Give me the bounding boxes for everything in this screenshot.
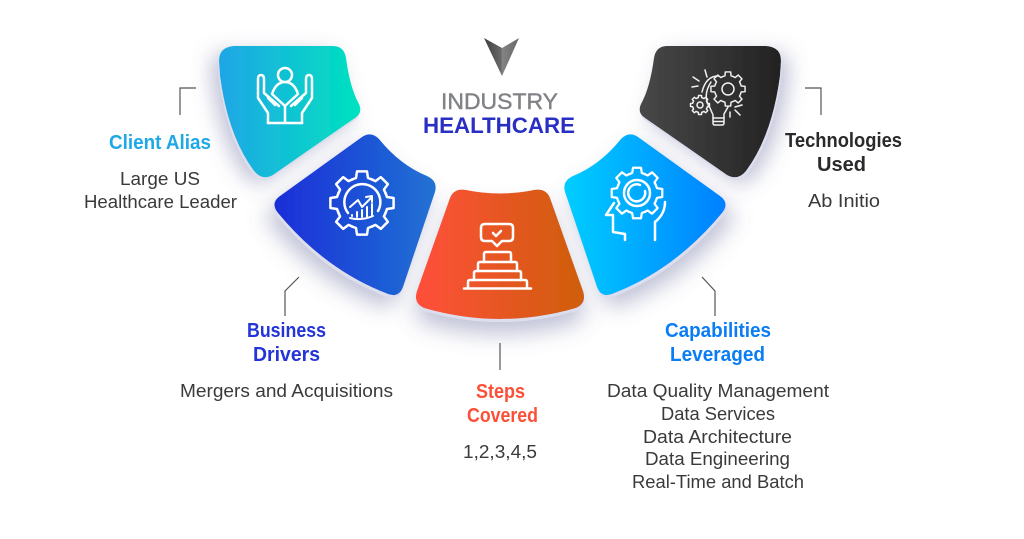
title: HEALTHCARE (423, 113, 575, 138)
text block: client alias: Large US (120, 169, 200, 189)
text block: client alias (84, 132, 237, 212)
text block: steps covered (463, 381, 538, 462)
panel: technologies used (640, 46, 781, 177)
text block: capabilities leveraged: Data Architecture (643, 427, 792, 447)
panel: steps covered (416, 190, 584, 319)
text block: business drivers (180, 320, 393, 401)
logo (484, 38, 519, 76)
text block: business drivers: Drivers (253, 344, 320, 366)
panel: business drivers (274, 134, 436, 295)
text block: technologies used: Ab Initio (808, 191, 880, 211)
leader line: steps covered (499, 343, 501, 370)
text block: steps covered: Steps (476, 381, 525, 403)
text block: capabilities leveraged: Real-Time and Batch (632, 472, 804, 492)
text block: capabilities leveraged (607, 320, 829, 492)
leader line: capabilities leveraged (702, 277, 715, 316)
leader line: business drivers (285, 277, 299, 316)
text block: technologies used: Technologies (785, 130, 902, 152)
text block: business drivers: Business (247, 320, 326, 342)
icon: hands holding person (258, 68, 312, 123)
text block: technologies used (785, 130, 902, 211)
text block: capabilities leveraged: Capabilities (665, 320, 771, 342)
text block: technologies used: Used (817, 154, 866, 176)
icon: light bulb with gears (691, 70, 745, 125)
leader line: technologies used (805, 88, 821, 115)
title: INDUSTRY (441, 89, 558, 114)
icon: head with gear (606, 168, 665, 240)
text block: steps covered: Covered (467, 405, 538, 427)
title (423, 89, 575, 138)
icon: stairs with check speech bubble (464, 224, 531, 288)
text block: client alias: Client Alias (109, 132, 211, 154)
text block: client alias: Healthcare Leader (84, 192, 237, 212)
text block: capabilities leveraged: Data Quality Management (607, 381, 829, 401)
leader line: client alias (180, 88, 196, 115)
text block: business drivers: Mergers and Acquisitions (180, 381, 393, 401)
text block: steps covered: 1,2,3,4,5 (463, 442, 537, 462)
text block: capabilities leveraged: Leveraged (670, 344, 765, 366)
text block: capabilities leveraged: Data Engineering (645, 449, 790, 469)
icon: gear with growth chart (330, 171, 394, 235)
panel: capabilities leveraged (564, 134, 726, 295)
panel: client alias (219, 46, 360, 177)
text block: capabilities leveraged: Data Services (661, 404, 775, 424)
